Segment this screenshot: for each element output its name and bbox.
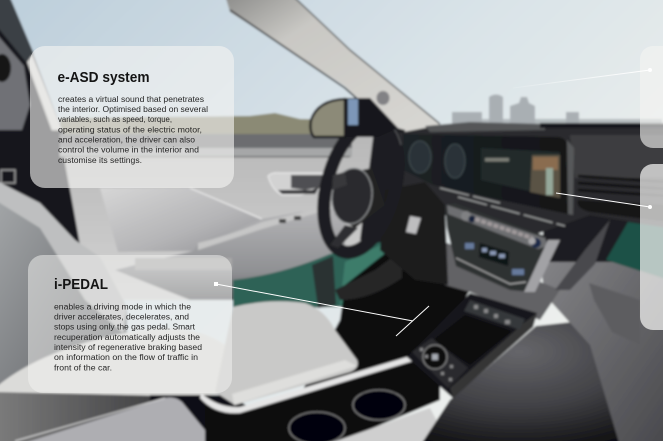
center stack [445,203,560,292]
steering wheel [311,113,411,261]
door storage bin [100,188,262,252]
panel background [30,46,234,188]
white console trim [200,356,413,413]
driver seat cushion [215,301,358,405]
body text: the interior. Optimised based on several [58,105,208,114]
panel: right lower (cropped) [640,164,663,330]
panel: e-ASD system [30,46,234,188]
body text: intensity of regenerative braking based [54,343,202,352]
heading: i-PEDAL: i-PEDAL [54,277,108,293]
body text: recuperation automatically adjusts the [54,333,201,342]
dark floor area [150,395,300,441]
infotainment photo [530,155,560,198]
lower right console [420,320,663,441]
wing mirror [310,98,398,137]
climate buttons [465,243,524,275]
door handle [268,173,327,195]
panel: right upper (cropped) [640,46,663,148]
body text: and acceleration, the driver can also [58,136,196,144]
body text: variables, such as speed, torque, [58,115,172,124]
body text: customise its settings. [58,156,142,165]
body text: on information on the flow of traffic in [54,353,198,362]
rotary selector [423,345,447,369]
city skyline [452,94,662,126]
green footwell glow [233,240,402,310]
spokes [330,225,358,248]
console buttons [420,305,510,381]
cup holders [289,390,405,441]
heading: e-ASD system: e-ASD system [58,70,150,86]
panel: i-PEDAL [28,255,232,393]
instrument cluster gauges [409,141,465,178]
console well [300,235,470,395]
body text: creates a virtual sound that penetrates [58,95,204,104]
silver dash strip [440,188,565,226]
centre console control unit [407,293,537,398]
dark area behind the wheel [360,122,405,250]
console dark body [205,358,440,441]
rear floor [0,392,170,441]
speaker grille [376,91,390,105]
climate knobs [461,211,471,221]
body text: operating status of the electric motor, [58,126,202,134]
panel background [28,255,232,393]
curved display [403,134,574,215]
body text [58,95,208,165]
dashboard [395,124,663,240]
leader line: i-PEDAL to console [214,282,429,336]
body text: control the volume in the interior and [58,146,199,154]
body text: enables a driving mode in which the [54,302,192,312]
window switches [279,216,301,223]
air vent [578,176,663,196]
leader line: upper right panel [513,68,652,88]
infotainment screen [481,148,560,198]
A-pillar [225,0,440,133]
body text: driver accelerates, decelerates, and [54,312,189,322]
lower door [115,208,345,300]
leader line: lower right panel to display [556,193,652,209]
steering wheel hub [333,168,385,228]
rear passenger seat [0,182,127,400]
steering column [380,182,448,285]
climate display [479,243,509,266]
body text: front of the car. [54,364,112,372]
body text [54,302,202,372]
body text: stops using only the gas pedal. Smart [54,322,196,332]
left door frame [0,0,100,260]
distant landscape [60,113,345,136]
central tray [15,398,218,441]
door sill and upper door [60,134,400,300]
